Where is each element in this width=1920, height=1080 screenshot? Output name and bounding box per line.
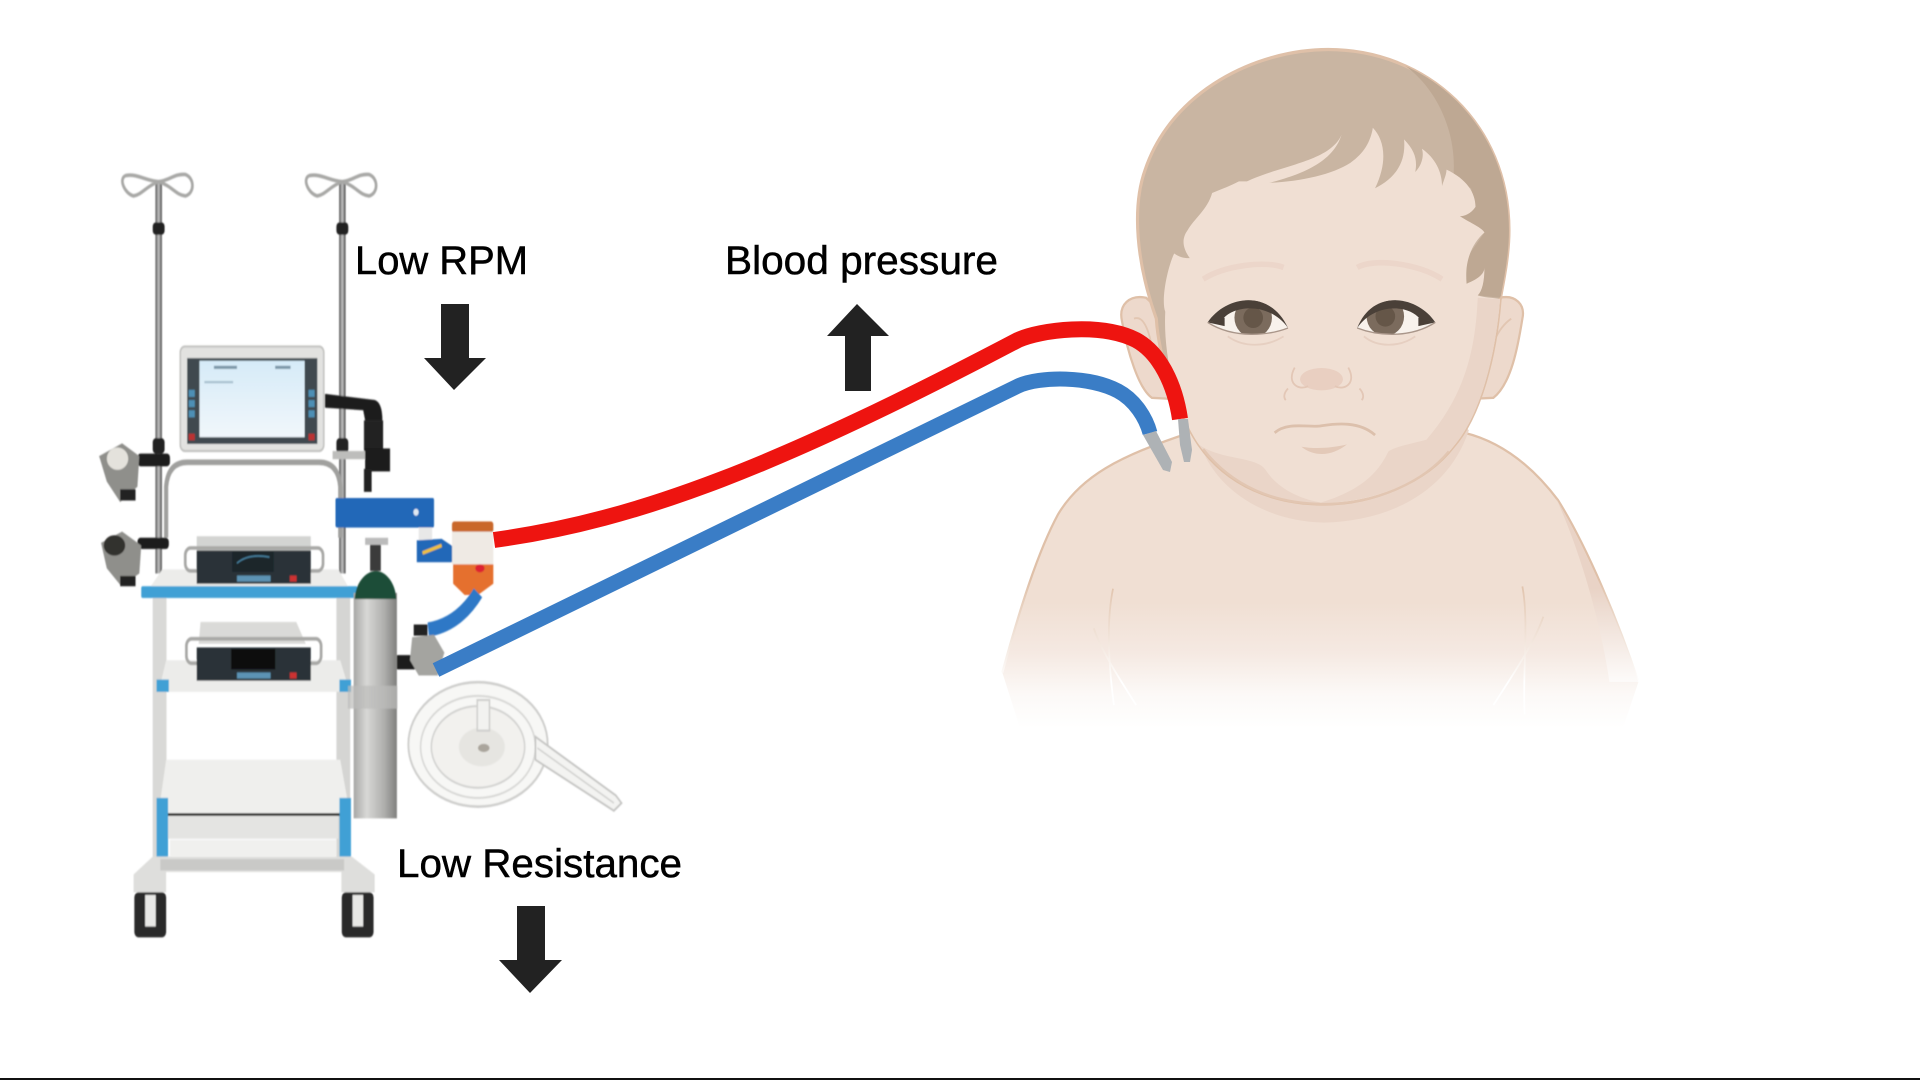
panel: ECMO cart (99, 174, 622, 937)
IV pole right (306, 174, 376, 573)
top shelf (141, 569, 357, 598)
neck shadow (1199, 402, 1469, 523)
panel: infant (1002, 50, 1638, 728)
arrow: resistance down (499, 906, 562, 993)
cannula tip venous (1143, 431, 1172, 472)
left eye (1208, 298, 1288, 345)
arterial tube (494, 329, 1180, 540)
mouth (1275, 424, 1375, 454)
centrifugal pump disk (408, 682, 622, 811)
head and hair (1138, 50, 1509, 504)
cart frame (153, 596, 350, 867)
face skin (1164, 128, 1500, 503)
middle shelf (157, 660, 351, 692)
arrow: RPM down (424, 304, 486, 390)
short blue tube (428, 593, 478, 630)
bottom shelf (157, 760, 351, 857)
cart base and wheels (134, 857, 375, 937)
top device (185, 536, 323, 584)
right pump head (397, 624, 444, 676)
infant torso (1002, 433, 1638, 728)
middle device (186, 622, 321, 681)
label: Blood pressure: Blood pressure (725, 239, 998, 283)
cheek shading (1199, 298, 1500, 503)
monitor (180, 346, 324, 451)
left ear (1121, 297, 1170, 399)
eyebrows (1203, 263, 1442, 279)
monitor arm and clamp (325, 394, 390, 492)
right eye (1357, 297, 1435, 345)
upper-left pump head (99, 443, 170, 502)
IV pole left (122, 174, 192, 573)
darker hair on right side (1404, 65, 1516, 298)
arrow: blood pressure up (827, 304, 889, 391)
right ear (1473, 297, 1523, 399)
blue motor holder (336, 498, 463, 562)
chin line (1203, 449, 1449, 504)
label: Low RPM: Low RPM (355, 239, 528, 283)
cannula tip arterial (1178, 419, 1192, 462)
venous tube (436, 379, 1150, 670)
nose (1284, 368, 1363, 400)
handle (166, 462, 340, 538)
oxygenator (452, 521, 493, 595)
oxygen tank (348, 538, 398, 818)
label: Low Resistance: Low Resistance (397, 842, 682, 886)
bottom edge line (0, 1078, 1920, 1080)
hair strand highlight (1234, 135, 1342, 188)
lower-left pump head (101, 532, 169, 586)
